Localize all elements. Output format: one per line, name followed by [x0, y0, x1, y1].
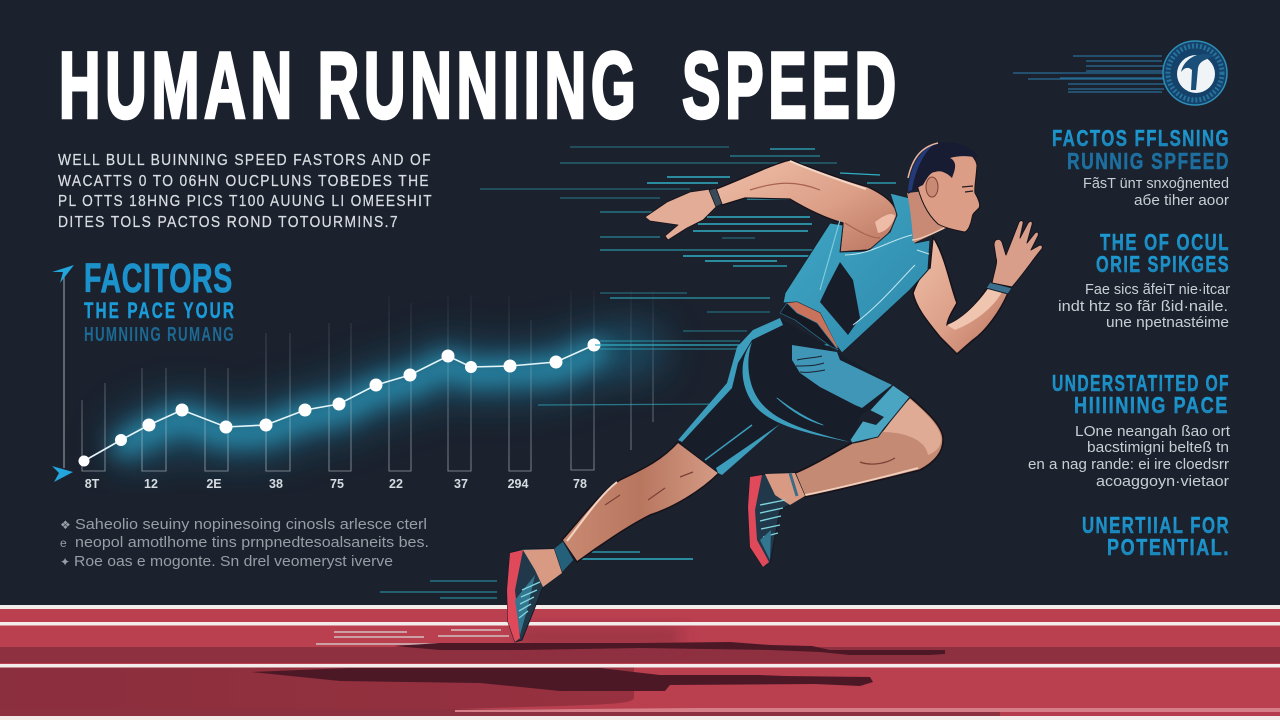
- rear leg: [562, 442, 719, 562]
- side panel 3: en a nag rande: ei ire cloedsrr: [1028, 456, 1229, 473]
- side panel 3: acoaggoyn·vietaor: [1096, 473, 1229, 490]
- chart axis labels: 22: [389, 477, 403, 491]
- side panel 2: [1058, 229, 1230, 331]
- bullet notes: neopol amotlhome tins prnpnedtesoalsaneits bes.: [75, 534, 429, 551]
- side panel 2: THE OF OCUL: [1100, 229, 1230, 255]
- neck and head: [907, 142, 980, 243]
- bullet notes: [60, 516, 429, 570]
- singlet top: [783, 193, 930, 353]
- data line and points: [78, 338, 600, 466]
- chart heading: FACITORS: [84, 255, 233, 301]
- axis arrow bottom: [52, 466, 73, 482]
- shorts hem streaks: [705, 425, 752, 460]
- side panel 4: POTENTIAL.: [1107, 534, 1230, 560]
- side panel 3: HIIIINING PACE: [1074, 392, 1229, 418]
- logo badge: [1163, 41, 1227, 105]
- runner shadows: [251, 642, 945, 691]
- side panel 3: bacstimigni belteß tn: [1087, 439, 1229, 456]
- shorts hem: [850, 385, 910, 443]
- side panel 2: Fae sics ãfeiT nie·itcar: [1085, 281, 1230, 298]
- intro text block: [58, 152, 433, 231]
- front shoe: [748, 473, 805, 567]
- rear shoe: [507, 548, 562, 642]
- intro text block: DITES TOLS PACTOS ROND TOTOURMINS.7: [58, 214, 399, 231]
- chart axis labels: 2E: [206, 477, 222, 491]
- chart axis labels: [85, 477, 587, 491]
- runner: [507, 142, 1042, 642]
- chart axis labels: 294: [508, 477, 528, 491]
- front leg: [795, 397, 943, 497]
- logo speed lines: [1013, 56, 1165, 92]
- track shading: [0, 628, 1280, 716]
- running track: [0, 605, 1280, 720]
- waistband: [780, 303, 838, 350]
- chart axis labels: 38: [269, 477, 283, 491]
- intro text block: PL OTTS 18HNG PICS T100 AUUNG LI OMEESHIT: [58, 193, 433, 210]
- side panel 1: [1052, 125, 1230, 209]
- intro text block: WACATTS 0 TO 06HN OUCPLUNS TOBEDES THE: [58, 173, 430, 190]
- side panel 4: UNERTIIAL FOR: [1082, 512, 1230, 538]
- chart heading: [84, 255, 236, 346]
- bullet notes: Roe oas e mogonte. Sn drel veomeryst iverve: [74, 553, 393, 570]
- line chart: [52, 265, 653, 491]
- chart axis: [52, 265, 74, 482]
- bullet notes: ✦: [60, 555, 70, 569]
- front arm: [913, 237, 1008, 354]
- intro text block: WELL BULL BUINNING SPEED FASTORS AND OF: [58, 152, 432, 169]
- side panel 3: LOne neangah ßao ort: [1075, 423, 1231, 440]
- side panel 2: ORIE SPIKGES: [1096, 251, 1230, 277]
- bullet notes: ❖: [60, 518, 71, 532]
- shorts rear strip: [678, 318, 783, 442]
- side panel 4: [1082, 512, 1230, 560]
- rear sock: [553, 541, 574, 573]
- chart axis labels: 37: [454, 477, 468, 491]
- track speed marks: [316, 630, 509, 644]
- lane lines: [0, 605, 1280, 720]
- chart heading: HUMNIING RUMANG: [84, 324, 235, 346]
- rear arm: [716, 160, 897, 252]
- chart grid bars: [82, 290, 653, 471]
- chart axis labels: 78: [573, 477, 587, 491]
- side panel 2: indt htz so fãr ßid·naile.: [1058, 298, 1228, 315]
- side panel 1: RUNNIG SPFEED: [1067, 148, 1230, 174]
- chart axis labels: 75: [330, 477, 344, 491]
- chart axis labels: 12: [144, 477, 158, 491]
- front hand: [992, 221, 1042, 287]
- bullet notes: e: [60, 536, 67, 550]
- bullet notes: Saheolio seuiny nopinesoing cinosls arlesce cterl: [75, 516, 427, 533]
- shorts: [678, 318, 910, 475]
- side panel 1: aбe tiher aoor: [1134, 192, 1229, 209]
- rear wrist band: [709, 188, 722, 207]
- chart glow: [125, 350, 640, 445]
- shorts thigh panel: [792, 345, 892, 408]
- motion speed lines: [380, 147, 896, 598]
- chart axis labels: 8T: [85, 477, 100, 491]
- side panel 3: [1028, 370, 1231, 490]
- side panel 1: FãsT ünт snxoĝnented: [1083, 175, 1229, 192]
- shorts curved seam: [743, 342, 850, 442]
- side panel 2: une npetnastéime: [1106, 314, 1229, 331]
- front wrist band: [986, 282, 1012, 294]
- chart heading: THE PACE YOUR: [84, 298, 236, 323]
- axis arrow top: [52, 265, 74, 283]
- rear hand: [645, 189, 718, 240]
